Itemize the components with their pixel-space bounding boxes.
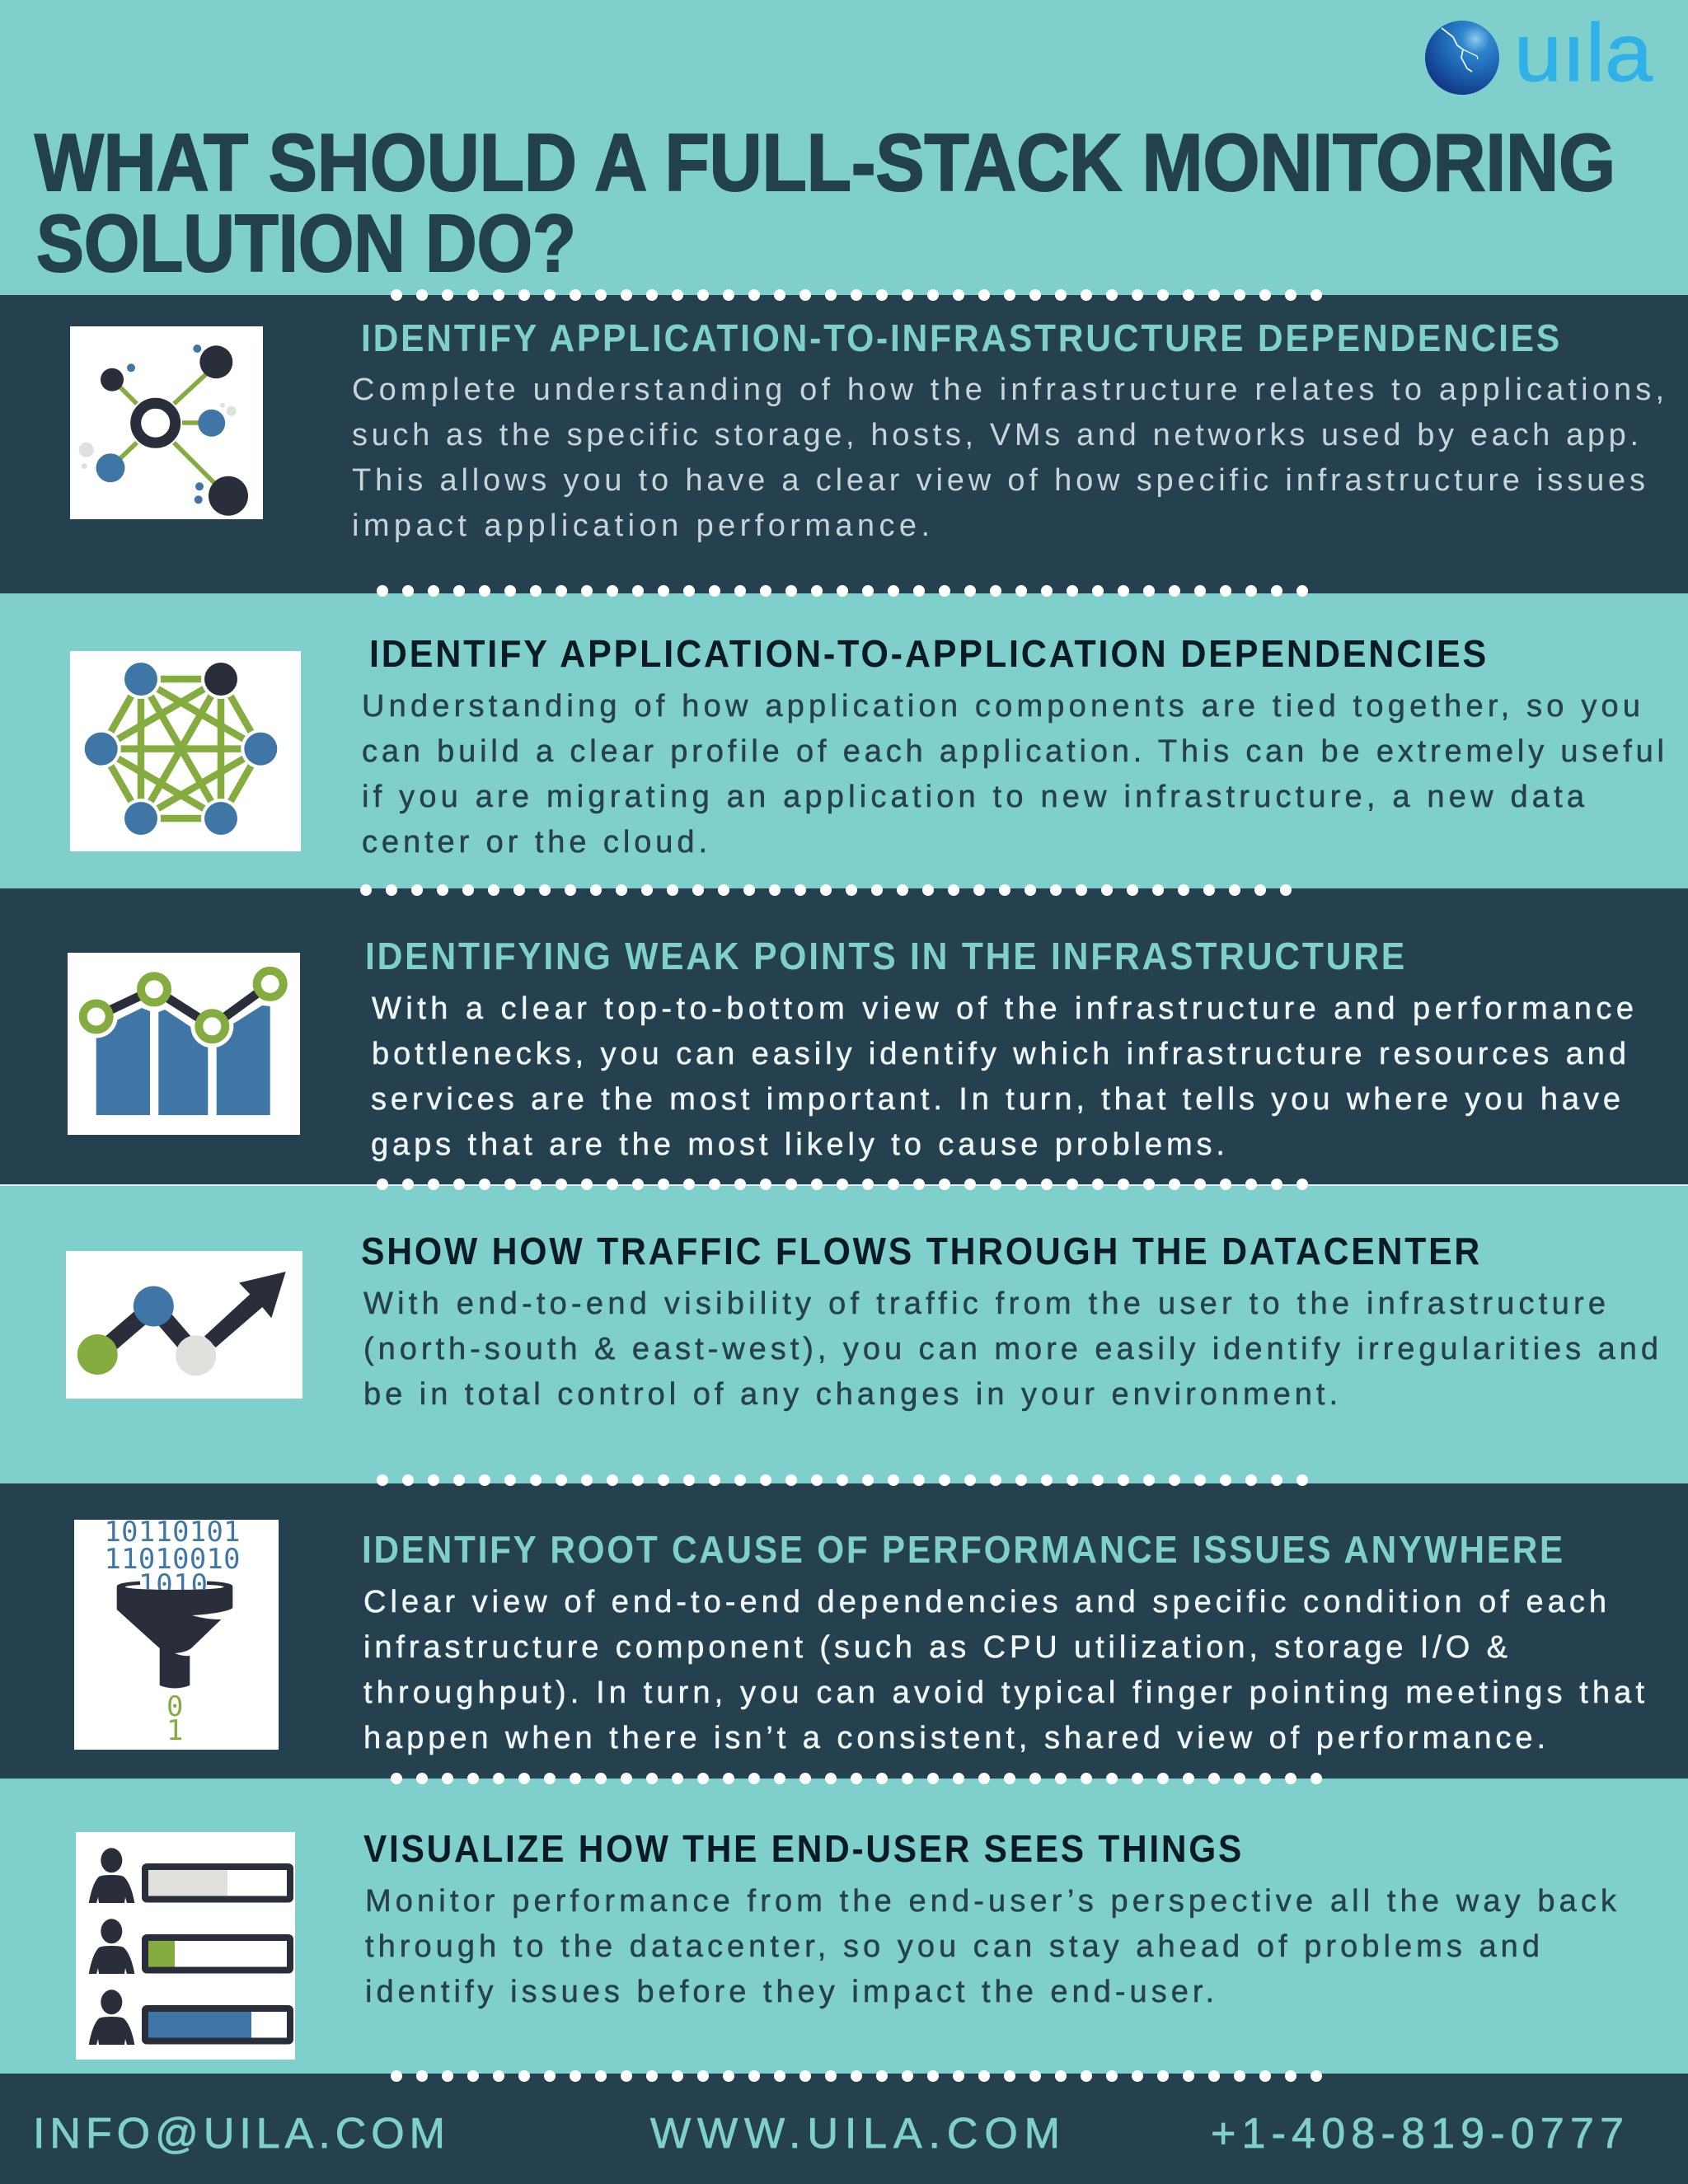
text block: Monitor performance from the end-user’s perspective all the way back: [365, 1884, 1617, 1919]
panel: end-user view: [0, 1779, 1688, 2074]
icon: data funnel: [74, 1516, 279, 1750]
phone: +1-408-819-0777: [1211, 2110, 1624, 2158]
icon: mesh network: [70, 651, 301, 851]
text block: center or the cloud.: [362, 825, 707, 860]
panel: application-to-application dependencies: [0, 593, 1688, 888]
text block: Complete understanding of how the infrastructure relates to applications,: [352, 373, 1664, 407]
header panel: [0, 0, 1688, 295]
icon: network hub: [70, 326, 263, 519]
icon: data funnel: 0: [166, 1690, 183, 1722]
heading: SHOW HOW TRAFFIC FLOWS THROUGH THE DATACENTER: [361, 1230, 1482, 1272]
icon: users and progress bars: [76, 1832, 295, 2060]
heading: IDENTIFY APPLICATION-TO-INFRASTRUCTURE DEPENDENCIES: [361, 316, 1562, 359]
text block: With end-to-end visibility of traffic from the user to the infrastructure: [363, 1286, 1606, 1321]
email: INFO@UILA.COM: [33, 2110, 445, 2158]
panel: root cause: [0, 1483, 1688, 1779]
text block: happen when there isn’t a consistent, shared view of performance.: [363, 1721, 1545, 1755]
text block: [362, 689, 1664, 860]
text block: can build a clear profile of each application. This can be extremely useful: [362, 734, 1664, 769]
icon: data funnel: 1010: [138, 1568, 208, 1601]
text block: throughput). In turn, you can avoid typical finger pointing meetings that: [363, 1675, 1644, 1710]
heading: VISUALIZE HOW THE END-USER SEES THINGS: [363, 1827, 1244, 1870]
text block: services are the most important. In turn, that tells you where you have: [371, 1082, 1620, 1117]
text block: be in total control of any changes in your environment.: [363, 1377, 1338, 1412]
text block: This allows you to have a clear view of how specific infrastructure issues: [352, 463, 1645, 498]
text block: Understanding of how application components are tied together, so you: [362, 689, 1640, 724]
text block: [352, 373, 1664, 543]
text block: [363, 1585, 1644, 1755]
heading: IDENTIFY APPLICATION-TO-APPLICATION DEPENDENCIES: [369, 632, 1489, 675]
text block: bottlenecks, you can easily identify which infrastructure resources and: [372, 1037, 1626, 1071]
logo: uila: [1425, 7, 1653, 98]
text block: identify issues before they impact the end-user.: [365, 1975, 1214, 2009]
icon: data funnel: 10110101: [104, 1516, 241, 1548]
text block: (north-south & east-west), you can more easily identify irregularities and: [363, 1332, 1658, 1366]
text block: [363, 1286, 1658, 1412]
icon: data funnel: 11010010: [104, 1543, 241, 1575]
text block: through to the datacenter, so you can stay ahead of problems and: [365, 1929, 1540, 1964]
text block: [365, 1884, 1617, 2009]
panel: weak points in the infrastructure: [0, 888, 1688, 1185]
title: [35, 117, 1615, 288]
website: WWW.UILA.COM: [650, 2110, 1060, 2158]
text block: if you are migrating an application to new infrastructure, a new data: [362, 780, 1585, 814]
title: SOLUTION DO?: [36, 198, 576, 288]
panel: application-to-infrastructure dependencies: [0, 295, 1688, 593]
text block: Clear view of end-to-end dependencies and specific condition of each: [363, 1585, 1606, 1619]
text block: [371, 991, 1634, 1162]
heading: IDENTIFYING WEAK POINTS IN THE INFRASTRUCTURE: [365, 935, 1407, 977]
heading: IDENTIFY ROOT CAUSE OF PERFORMANCE ISSUES ANYWHERE: [362, 1528, 1565, 1571]
icon: traffic arrow: [66, 1251, 302, 1399]
icon: bar and line chart: [68, 953, 300, 1135]
footer panel: [0, 2074, 1688, 2184]
panel: traffic flows: [0, 1184, 1688, 1483]
text block: gaps that are the most likely to cause problems.: [371, 1127, 1225, 1162]
text block: With a clear top-to-bottom view of the infrastructure and performance: [372, 991, 1634, 1026]
text block: infrastructure component (such as CPU utilization, storage I/O &: [363, 1630, 1507, 1665]
icon: data funnel: 1: [166, 1714, 183, 1746]
logo: uila: uıla: [1514, 7, 1653, 98]
text block: such as the specific storage, hosts, VMs and networks used by each app.: [352, 418, 1639, 452]
text block: impact application performance.: [352, 509, 930, 543]
